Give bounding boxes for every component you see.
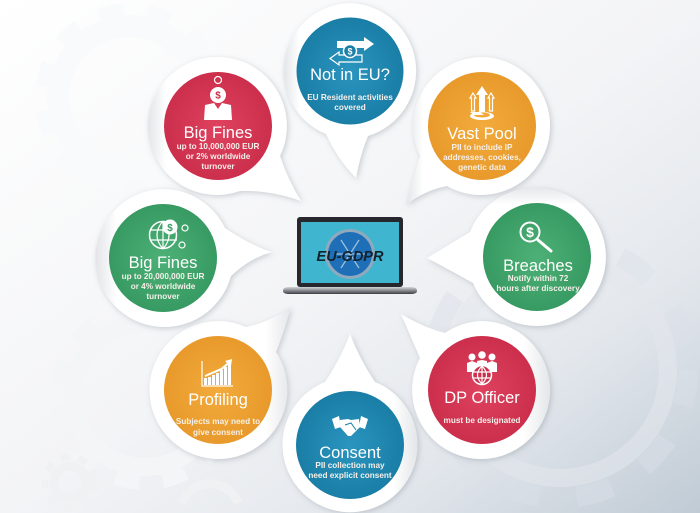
heading: Big Fines [129, 254, 197, 272]
icon: globe and coins [150, 220, 188, 249]
icon: exchange arrows: $ [347, 46, 353, 56]
icon: globe and coins: $ [167, 223, 173, 234]
speech shape [427, 188, 606, 326]
speech shape [148, 57, 301, 201]
speech shape [284, 3, 416, 178]
speech shape [95, 189, 272, 327]
heading: Not in EU? [310, 66, 390, 84]
description: Subjects may need to [176, 417, 260, 426]
bubble: Not in EU? [284, 3, 416, 178]
icon: growth chart [202, 359, 233, 386]
icon: arrows and money [470, 86, 494, 120]
description: must be designated [444, 416, 520, 425]
speech shape [149, 307, 291, 459]
heading: DP Officer [444, 389, 520, 407]
icon: magnifier [520, 222, 551, 251]
bubble: Vast Pool: addresses, cookies, [443, 153, 521, 162]
circle [483, 203, 591, 311]
bubble: Big Fines 20,000,000: or 4% worldwide [131, 282, 196, 291]
icon: exchange arrows [330, 37, 374, 65]
bubble: Vast Pool [406, 57, 550, 205]
heading: Big Fines [184, 124, 252, 142]
description: up to 10,000,000 EUR [177, 142, 259, 151]
logo disc [326, 230, 374, 278]
icon: businessman [204, 76, 232, 120]
circle [296, 18, 404, 124]
icon: magnifier: $ [526, 224, 534, 240]
bubble: Consent [282, 334, 418, 512]
icon: team and globe [467, 351, 497, 384]
circle [109, 204, 217, 312]
bubble: Profiling: give consent [193, 428, 243, 437]
bubble: Big Fines 20,000,000: turnover [146, 292, 180, 301]
bubble: Profiling [149, 307, 291, 459]
laptop screen [301, 222, 399, 283]
circle [164, 72, 272, 180]
bubble: Big Fines 10,000,000 [148, 57, 301, 201]
laptop: EU-GDPR [283, 217, 417, 294]
laptop label: EU-GDPR [316, 249, 384, 265]
bubble: Big Fines 20,000,000 [95, 189, 272, 327]
bubble: Breaches: hours after discovery [496, 284, 580, 293]
heading: Profiling [188, 391, 248, 409]
bubble: DP Officer [401, 314, 550, 459]
circle [296, 391, 404, 499]
bubble: Consent: need explicit consent [308, 471, 392, 480]
speech shape [401, 314, 550, 459]
icon: businessman: $ [215, 90, 221, 102]
description: Notify within 72 [508, 274, 569, 283]
bubble: Breaches [427, 188, 606, 326]
circle [428, 336, 536, 444]
heading: Consent [319, 444, 381, 462]
speech shape [406, 57, 550, 205]
bubble: Vast Pool: genetic data [458, 163, 506, 172]
description: PII to include IP [452, 143, 513, 152]
speech shape [282, 334, 418, 512]
circle [428, 72, 536, 180]
circle [164, 336, 272, 444]
bubble: Not in EU?: covered [334, 103, 366, 112]
heading: Vast Pool [447, 125, 517, 143]
laptop base [283, 287, 417, 294]
icon: handshake [332, 416, 368, 436]
description: EU Resident activities [307, 93, 393, 102]
description: PII collection may [315, 461, 385, 470]
heading: Breaches [503, 257, 573, 275]
bubble: Big Fines 10,000,000: turnover [201, 162, 235, 171]
laptop lid [297, 217, 403, 287]
bubble: Big Fines 10,000,000: or 2% worldwide [186, 152, 251, 161]
description: up to 20,000,000 EUR [122, 272, 204, 281]
